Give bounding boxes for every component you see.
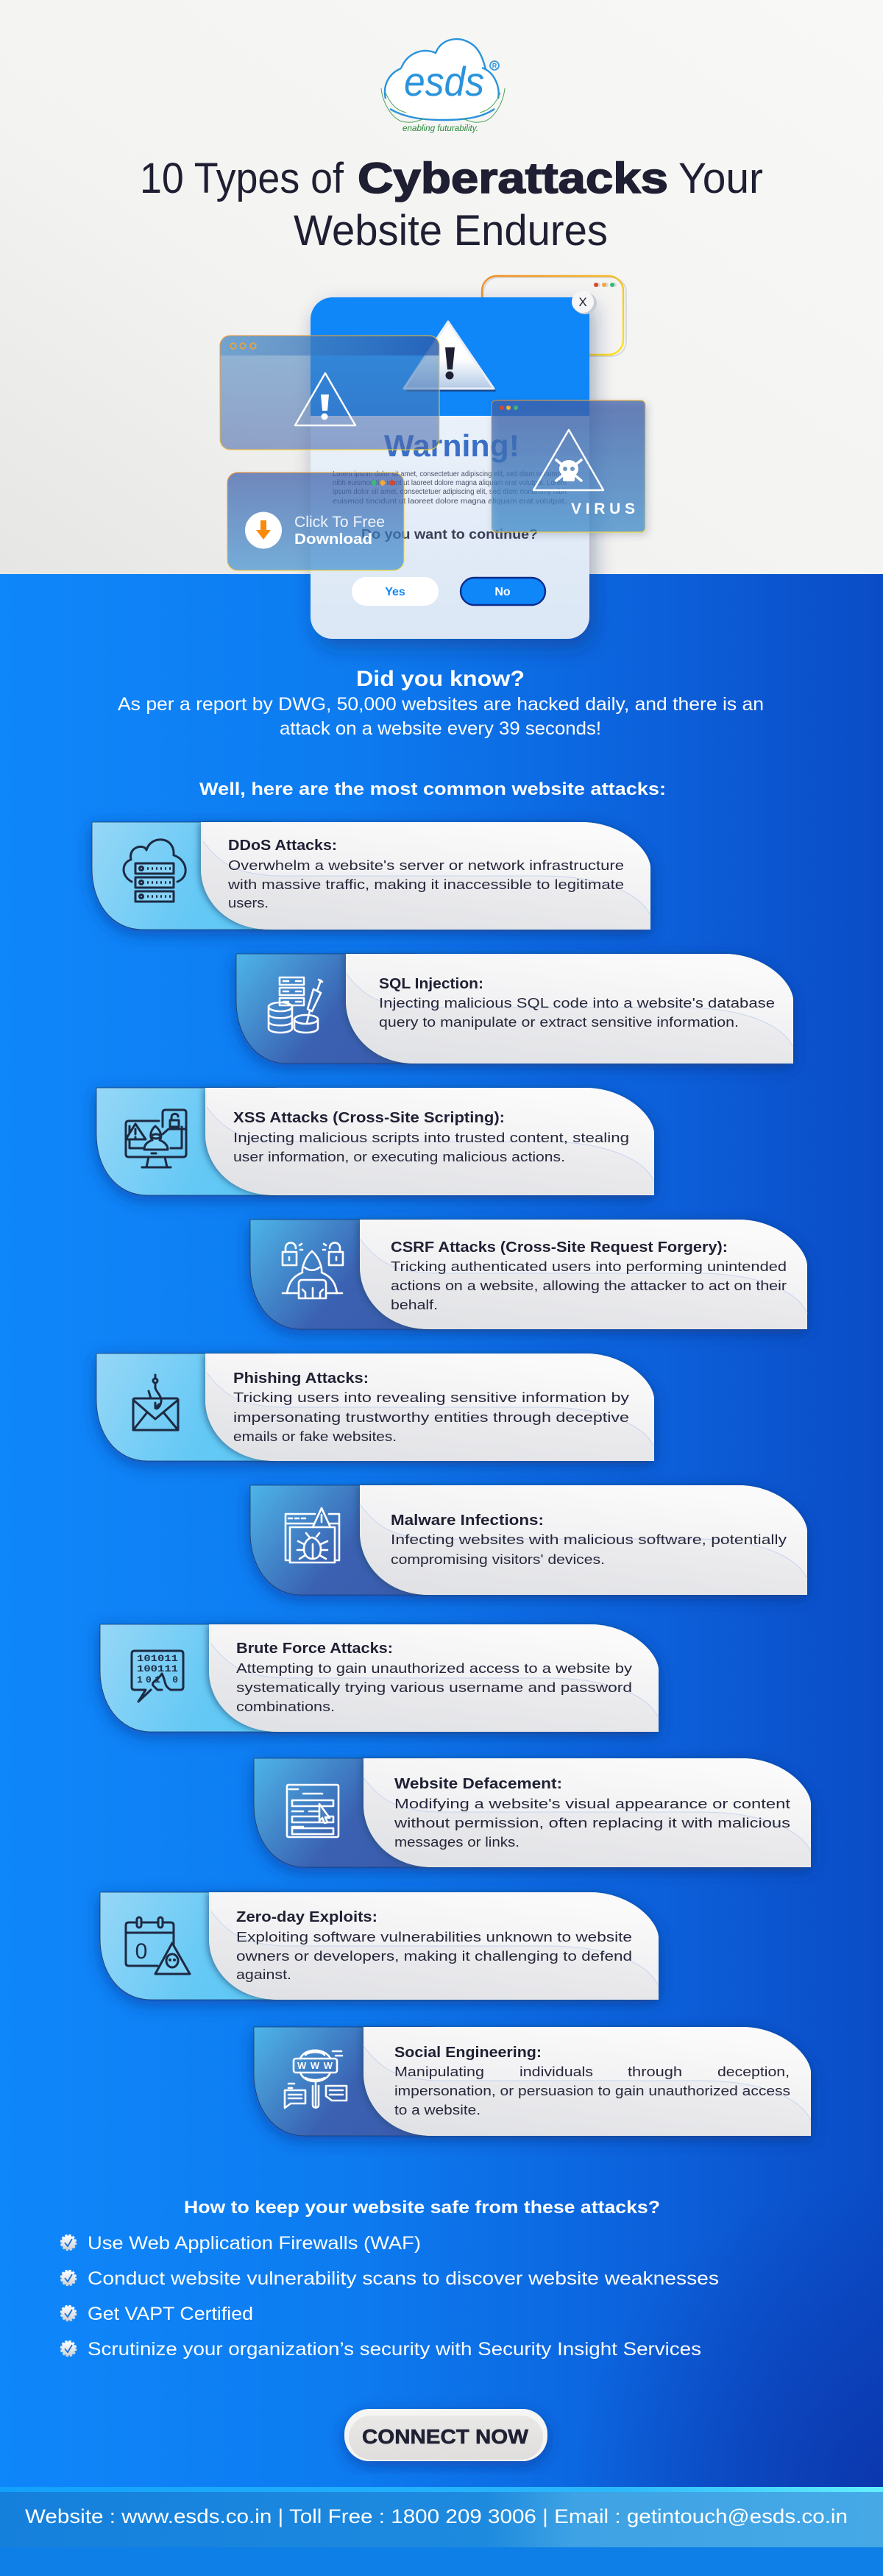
card: Malware Infections: [250, 1485, 807, 1595]
text: Zero-day: [236, 1909, 632, 1982]
yes button: Yes: [385, 586, 405, 598]
text: Zero-day: owners or developers, making it challenging to defend: [236, 1949, 632, 1964]
text: CSRF: CSRF Attacks (Cross-Site Request Forgery):: [391, 1239, 728, 1256]
text: Malware: compromising visitors' devices.: [391, 1552, 605, 1567]
text: Social Engineering: individuals: [519, 2064, 593, 2079]
text: SQL: [379, 976, 775, 1030]
text: Phishing: Tricking users into revealing sensitive information by: [233, 1390, 629, 1405]
download label: Click To Free: [294, 514, 385, 531]
title: [140, 155, 763, 255]
text: CSRF: actions on a website, allowing the attacker to act on their: [391, 1278, 787, 1293]
virus label: VIRUS: [571, 500, 635, 517]
download label: Download: [294, 531, 372, 548]
section heading: how to keep safe: How to keep your website safe from these attacks?: [184, 2198, 660, 2218]
text: Brute Force: Brute Force Attacks:: [236, 1641, 393, 1657]
icon: www magnifier and chat: [285, 2050, 347, 2108]
text: SQL: query to manipulate or extract sensitive information.: [379, 1015, 739, 1030]
item 4: Scrutinize your organization’s security with Security Insight Services: [88, 2339, 701, 2360]
section heading: common attacks: Well, here are the most common website attacks:: [199, 779, 666, 799]
text: Zero-day: Exploiting software vulnerabilities unknown to website: [236, 1930, 632, 1945]
intro: did you know: [118, 667, 764, 739]
close button: X: [578, 295, 587, 309]
text: XSS: [233, 1110, 629, 1164]
text: Brute Force: combinations.: [236, 1699, 335, 1714]
contact text: Website : www.esds.co.in | Toll Free : 1800 209 3006 | Email : getintouch@esds.co.in: [25, 2505, 848, 2527]
left translucent window: [220, 336, 439, 450]
download icon: [245, 512, 282, 549]
statistic text: attack on a website every 39 seconds!: [280, 718, 601, 739]
text: SQL: Injecting malicious SQL code into a website's database: [379, 996, 775, 1011]
text: Defacement: Modifying a website's visual appearance or content: [394, 1797, 790, 1811]
text: Defacement: [394, 1776, 790, 1850]
logo registered mark: R: [492, 62, 497, 69]
text: Defacement: without permission, often replacing it with malicious: [394, 1816, 790, 1830]
text: Social Engineering: through: [628, 2064, 682, 2079]
text: Zero-day: Zero-day Exploits:: [236, 1909, 377, 1925]
text: Malware: Malware Infections:: [391, 1512, 544, 1529]
statistic text: [118, 694, 764, 739]
card: CSRF Attacks: [250, 1220, 807, 1329]
text: Zero-day: against.: [236, 1967, 291, 1982]
lorem ipsum text: [333, 470, 567, 506]
title: Website Endures: [294, 207, 608, 255]
icon: phishing hook and envelope: [133, 1375, 178, 1430]
virus triangle with skull: [533, 430, 603, 490]
yes button: [352, 577, 439, 606]
text: XSS: user information, or executing malicious actions.: [233, 1150, 565, 1164]
icon: binary code speech bubble: 100111: [137, 1663, 178, 1674]
safety checklist: [62, 2233, 719, 2360]
text: Brute Force: [236, 1641, 632, 1714]
lorem ipsum text: nibh euismod tincidunt ut laoreet dolore magna aliquam erat volutpat. Lorem: [333, 479, 567, 487]
icon: calendar with skull warning: [126, 1917, 190, 1974]
text: DDoS: Overwhelm a website's server or network infrastructure: [228, 858, 624, 873]
logo wordmark: esds: [404, 58, 484, 105]
close button: [572, 291, 597, 314]
no button: [461, 578, 545, 605]
item 2: Conduct website vulnerability scans to discover website weaknesses: [88, 2268, 719, 2289]
question: Do you want to continue?: [361, 527, 538, 542]
main dialog panel: [311, 291, 597, 639]
download window: [227, 473, 404, 570]
text: Social Engineering: Social Engineering:: [394, 2045, 542, 2061]
logo tagline: enabling futurability.: [403, 123, 478, 133]
card: Social Engineering: [254, 2027, 811, 2136]
item 3: Get VAPT Certified: [88, 2304, 253, 2324]
text: Social Engineering: to a website.: [394, 2103, 480, 2117]
text: Phishing: emails or fake websites.: [233, 1429, 397, 1444]
card: Brute Force Attacks: [100, 1624, 659, 1732]
title: 10 Types of: [140, 155, 344, 202]
background: blue body: [0, 574, 883, 2576]
text: Brute Force: Attempting to gain unauthorized access to a website by: [236, 1661, 632, 1676]
warning heading: Warning!: [384, 428, 519, 463]
footer contact band: [0, 2487, 883, 2576]
button: connect now: [344, 2409, 547, 2461]
warning triangle: [404, 322, 496, 392]
icon: cloud server: [124, 840, 185, 902]
hero illustration: warning popups: [220, 276, 645, 639]
lorem ipsum text: Lorem ipsum dolor sit amet, consectetuer adipiscing elit, sed diam nonummy: [333, 470, 567, 478]
text: Social Engineering: [394, 2045, 790, 2117]
icon: defaced web page: [287, 1785, 338, 1837]
text: Defacement: Website Defacement:: [394, 1776, 562, 1792]
statistic text: As per a report by DWG, 50,000 websites are hacked daily, and there is an: [118, 694, 764, 715]
outline warning triangle: [295, 373, 355, 425]
logo registered mark: [490, 61, 499, 70]
text: Social Engineering: Manipulating: [394, 2064, 484, 2079]
text: Phishing: [233, 1370, 629, 1444]
text: DDoS: users.: [228, 896, 269, 910]
download label: [294, 514, 385, 548]
text: Defacement: messages or links.: [394, 1835, 519, 1850]
background: light header: [0, 0, 883, 574]
card: SQL Injection: [236, 954, 793, 1064]
text: Social Engineering: impersonation, or persuasion to gain unauthorized access: [394, 2084, 790, 2098]
outline window top right: [482, 276, 626, 356]
text: DDoS: [227, 838, 624, 910]
text: Brute Force: systematically trying various username and password: [236, 1680, 632, 1695]
card: DDoS Attacks: [92, 822, 650, 930]
icon: database and syringe: [269, 977, 322, 1033]
text: DDoS: with massive traffic, making it inaccessible to legitimate: [227, 877, 624, 892]
text: DDoS: DDoS Attacks:: [228, 838, 337, 854]
button: connect now: CONNECT NOW: [362, 2425, 529, 2448]
title: Cyberattacks: [358, 155, 668, 202]
text: Phishing: Phishing Attacks:: [233, 1370, 369, 1387]
text: Malware: [391, 1512, 787, 1567]
virus window: [492, 400, 645, 532]
icon: binary code speech bubble: 101011: [137, 1653, 178, 1664]
icon: www magnifier and chat: WWW: [297, 2060, 333, 2071]
text: XSS: XSS Attacks (Cross-Site Scripting):: [233, 1110, 505, 1126]
text: Social Engineering: deception,: [717, 2064, 790, 2079]
text: SQL: SQL Injection:: [379, 976, 483, 992]
text: Phishing: impersonating trustworthy entities through deceptive: [233, 1410, 629, 1425]
card: Phishing Attacks: [96, 1354, 654, 1461]
icon: malware bug window: [286, 1508, 339, 1563]
card: Website Defacement: [254, 1758, 811, 1867]
card: XSS Attacks: [96, 1088, 654, 1195]
title: Your: [678, 155, 763, 202]
logo: esds cloud: [381, 39, 505, 133]
lorem ipsum text: euismod tincidunt ut laoreet dolore magna aliquam erat volutpat.: [333, 498, 567, 506]
item 1: Use Web Application Firewalls (WAF): [88, 2233, 421, 2254]
lorem ipsum text: ipsum dolor sit amet, consectetuer adipiscing elit, sed diam nonummy nibh: [333, 488, 567, 496]
no button: No: [494, 586, 511, 598]
text: CSRF: [391, 1239, 787, 1312]
icon: monitor with hacker and lock: [126, 1110, 186, 1167]
text: XSS: Injecting malicious scripts into trusted content, stealing: [233, 1130, 629, 1145]
heading: Did you know?: [356, 667, 525, 691]
icon: binary code speech bubble: 101 0: [137, 1674, 178, 1685]
card: Zero-day Exploits: [100, 1892, 659, 2000]
icon: calendar with skull warning: 0: [135, 1939, 147, 1964]
text: CSRF: Tricking authenticated users into performing unintended: [391, 1259, 787, 1274]
text: CSRF: behalf.: [391, 1298, 438, 1312]
icon: binary code speech bubble: [132, 1651, 183, 1702]
icon: hooded hacker with locks: [283, 1242, 343, 1298]
text: Malware: Infecting websites with malicious software, potentially: [391, 1532, 787, 1547]
